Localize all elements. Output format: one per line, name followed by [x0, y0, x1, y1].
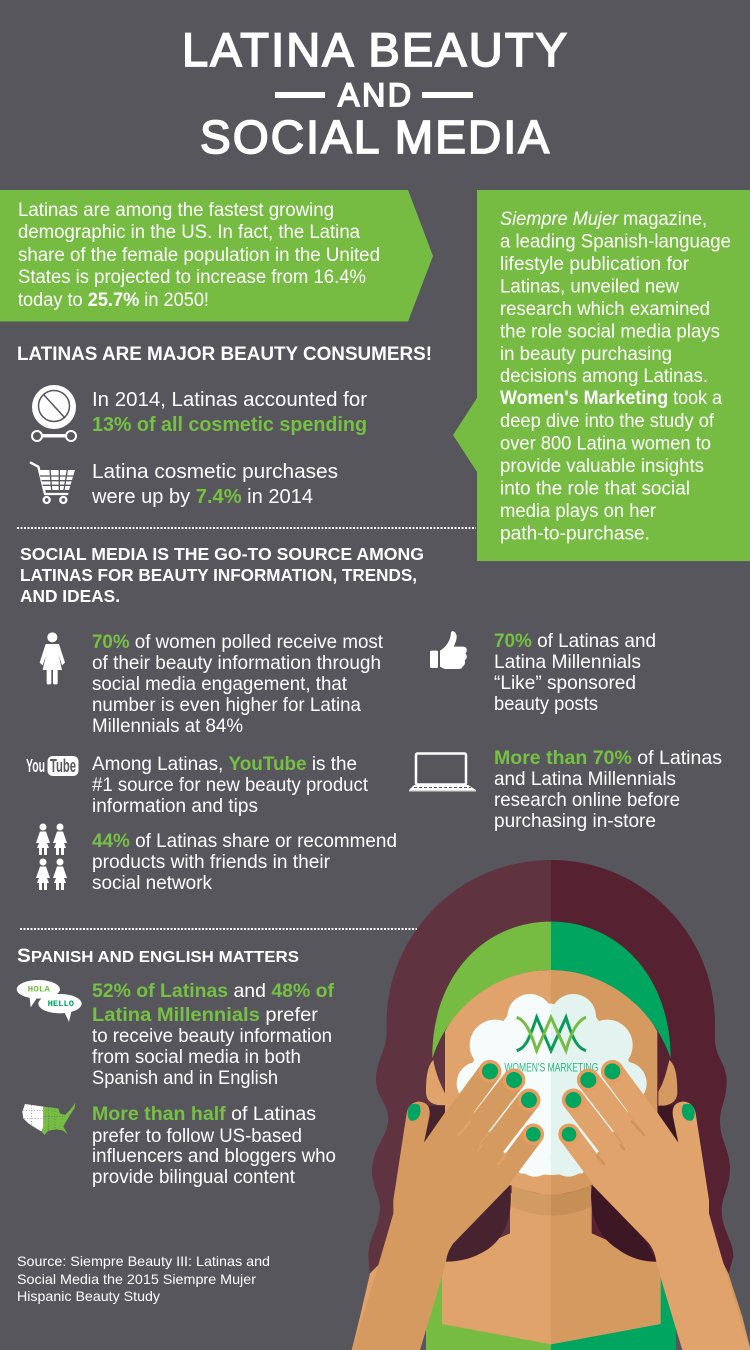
title: AND	[338, 77, 411, 113]
text: research online: More than 70% of Latinas	[494, 747, 722, 769]
panel: intro arrow: share of the female population in the United	[18, 245, 380, 266]
icon: woman	[40, 632, 65, 684]
text: research online	[494, 747, 722, 832]
heading: social media source: AND IDEAS.	[20, 586, 120, 606]
text: cosmetic spending	[92, 388, 367, 436]
text: 70% like: beauty posts	[494, 693, 598, 715]
text: YouTube source: information and tips	[92, 795, 258, 817]
text: 44% share: 44% of Latinas share or recommend	[92, 830, 397, 852]
text: YouTube source	[92, 753, 369, 817]
text: 70% of women: Millennials at 84%	[92, 715, 243, 737]
panel: Siempre Mujer research: Siempre Mujer magazine,	[500, 209, 707, 230]
text: 52% of Latinas: to receive beauty information	[92, 1025, 332, 1047]
source note	[17, 1253, 270, 1304]
icon: YouTube	[26, 756, 78, 776]
icon: shopping cart	[30, 462, 75, 503]
text: 52% of Latinas: Latina Millennials prefer	[92, 1004, 319, 1026]
text: 70% like: Latina Millennials	[494, 651, 641, 673]
source note: Source: Siempre Beauty III: Latinas and	[17, 1253, 270, 1269]
panel: Siempre Mujer research: over 800 Latina women to	[500, 434, 711, 454]
panel: Siempre Mujer research: a leading Spanish-language	[500, 232, 731, 252]
text: 44% share: products with friends in their	[92, 851, 330, 873]
panel: Siempre Mujer research: research which examined	[500, 299, 710, 320]
panel: Siempre Mujer research: lifestyle publication for	[500, 254, 690, 275]
title: LATINA BEAUTY	[182, 23, 567, 76]
illustration: woman covering face with hands	[352, 860, 750, 1350]
panel: intro arrow: today to 25.7% in 2050!	[18, 290, 209, 311]
text: 52% of Latinas: 52% of Latinas and 48% of	[92, 980, 334, 1002]
source note: Hispanic Beauty Study	[17, 1288, 160, 1304]
text: 70% of women	[92, 631, 384, 737]
icon: laptop	[409, 754, 476, 792]
icon: thumbs up	[430, 631, 467, 669]
heading: social media source: LATINAS FOR BEAUTY INFORMATION, TRENDS,	[20, 565, 417, 585]
icon: speech bubbles: HOLA	[28, 985, 50, 995]
panel: Siempre Mujer research: Women's Marketing took a	[500, 388, 722, 409]
text: 70% of women: number is even higher for Latina	[92, 694, 361, 716]
icon: YouTube: You	[26, 756, 45, 776]
panel: Siempre Mujer research: Latinas, unveiled new	[500, 276, 679, 298]
text: more than half: More than half of Latinas	[92, 1103, 316, 1125]
icon: compact mirror	[32, 385, 76, 441]
text: more than half: prefer to follow US-based	[92, 1125, 302, 1147]
text: 52% of Latinas: Spanish and in English	[92, 1067, 278, 1089]
panel: Siempre Mujer research: the role social media plays	[500, 322, 720, 342]
text: 70% of women: of their beauty information through	[92, 652, 381, 674]
text: cosmetic purchases	[91, 460, 338, 508]
panel: Siempre Mujer research: decisions among Latinas.	[500, 366, 708, 387]
panel: Siempre Mujer research: deep dive into the study of	[500, 411, 715, 432]
illustration: woman covering face with hands: WOMEN'S MARKETING	[504, 1061, 598, 1075]
text: more than half: provide bilingual content	[92, 1166, 296, 1188]
title: SOCIAL MEDIA	[200, 111, 549, 163]
text: YouTube source: #1 source for new beauty product	[92, 774, 369, 796]
text: research online: and Latina Millennials	[494, 768, 676, 790]
panel: Siempre Mujer research: into the role that social	[500, 478, 690, 500]
text: cosmetic purchases: were up by 7.4% in 2014	[91, 485, 313, 508]
panel: intro arrow: Latinas are among the fastest growing	[18, 200, 334, 221]
text: 70% like	[494, 630, 656, 715]
heading: beauty consumers: LATINAS ARE MAJOR BEAUTY CONSUMERS!	[17, 344, 432, 365]
text: more than half	[92, 1103, 336, 1188]
panel: Siempre Mujer research: in beauty purchasing	[500, 344, 672, 365]
text: 70% of women: 70% of women polled receive most	[92, 631, 384, 653]
text: 52% of Latinas: from social media in both	[92, 1046, 301, 1068]
heading: social media source	[20, 544, 424, 606]
panel: Siempre Mujer research	[453, 190, 750, 561]
text: 44% share	[92, 830, 397, 894]
heading: Spanish and English matters: SPANISH AND ENGLISH MATTERS	[17, 946, 299, 967]
text: cosmetic spending: In 2014, Latinas accounted for	[92, 388, 367, 411]
panel: intro arrow	[0, 190, 433, 322]
panel: Siempre Mujer research: media plays on her	[500, 501, 657, 522]
text: cosmetic purchases: Latina cosmetic purchases	[92, 460, 338, 483]
text: YouTube source: Among Latinas, YouTube is the	[92, 753, 357, 775]
text: 52% of Latinas	[92, 980, 334, 1089]
icon: speech bubbles: HELLO	[48, 999, 74, 1009]
text: more than half: influencers and bloggers who	[92, 1145, 336, 1167]
icon: speech bubbles	[17, 980, 82, 1022]
heading: social media source: SOCIAL MEDIA IS THE GO-TO SOURCE AMONG	[20, 544, 424, 564]
panel: Siempre Mujer research: provide valuable insights	[500, 456, 704, 477]
panel: Siempre Mujer research: path-to-purchase.	[500, 524, 650, 544]
panel: intro arrow: demographic in the US. In fact, the Latina	[18, 222, 360, 243]
text: cosmetic spending: 13% of all cosmetic spending	[92, 413, 367, 436]
text: 70% of women: social media engagement, that	[92, 673, 348, 695]
icon: YouTube: Tube	[50, 756, 76, 776]
text: 44% share: social network	[92, 872, 212, 894]
text: 70% like: “Like” sponsored	[494, 672, 636, 694]
text: research online: research online before	[494, 789, 680, 811]
source note: Social Media the 2015 Siempre Mujer	[17, 1271, 256, 1287]
title	[182, 23, 567, 163]
text: research online: purchasing in-store	[494, 810, 656, 832]
icon: four women	[36, 824, 67, 890]
panel: intro arrow: States is projected to increase from 16.4%	[18, 267, 366, 288]
icon: US map	[22, 1103, 76, 1135]
text: 70% like: 70% of Latinas and	[494, 630, 656, 652]
